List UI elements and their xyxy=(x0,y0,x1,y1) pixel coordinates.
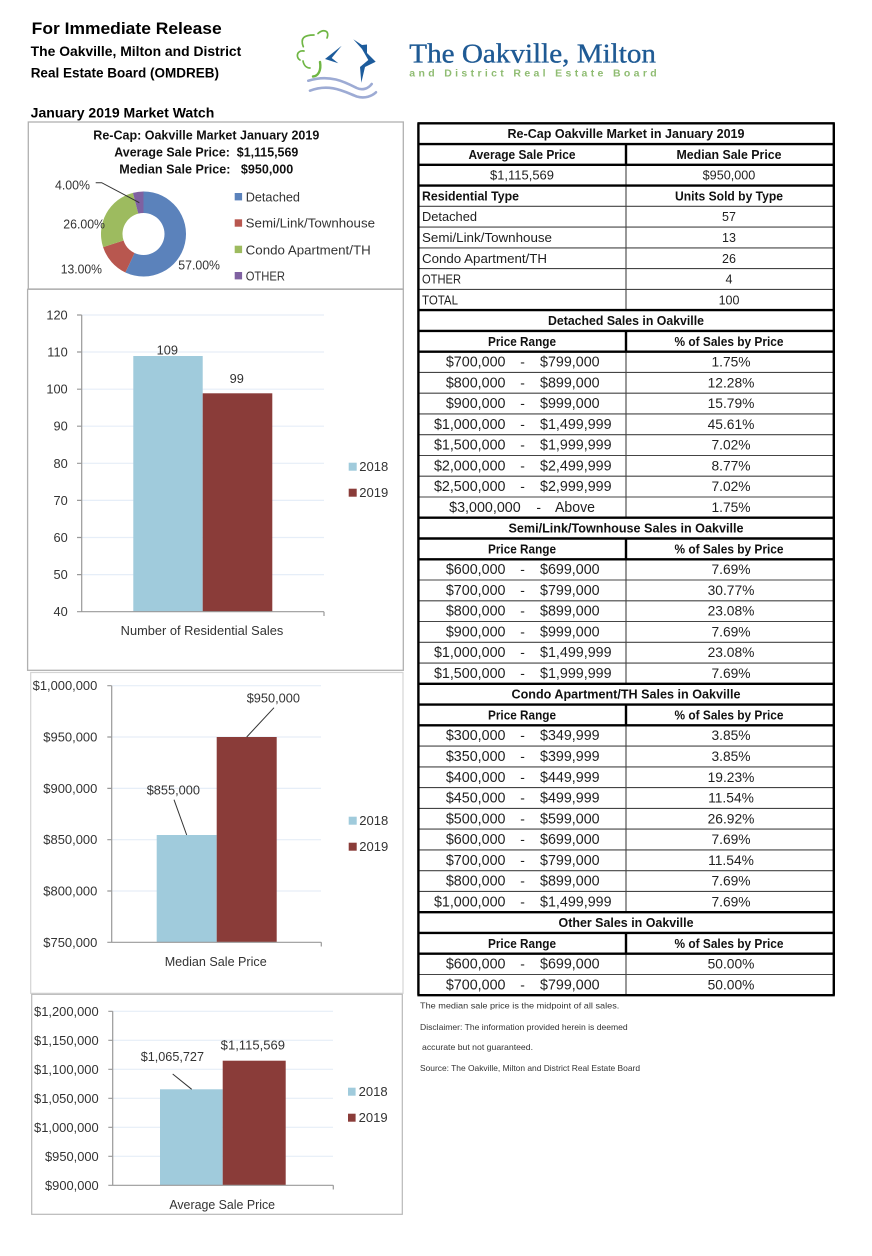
table section: condo apartment sales: $700,000 xyxy=(446,853,506,869)
donut chart xyxy=(101,192,186,276)
donut legend: Semi/Link/Townhouse xyxy=(246,216,375,231)
y axis labels: 90 xyxy=(53,419,68,434)
table section: recap: Average Sale Price xyxy=(468,148,576,162)
y axis labels: $1,000,000 xyxy=(33,678,97,693)
logo subtitle: and District Real Estate Board xyxy=(409,68,657,80)
table section: semi/link/townhouse sales: - xyxy=(520,604,525,619)
table section: semi/link/townhouse sales: - xyxy=(520,583,525,598)
legend: 2018 xyxy=(359,1084,388,1099)
table section: recap xyxy=(422,127,783,307)
chart title: Median Sale Price: $950,000 xyxy=(119,162,293,176)
table section: detached sales: % of Sales by Price xyxy=(674,335,784,349)
data labels with leader xyxy=(141,1037,285,1089)
table section: semi/link/townhouse sales: - xyxy=(520,645,525,660)
table section: condo apartment sales: $399,999 xyxy=(540,749,600,765)
table section: condo apartment sales: $800,000 xyxy=(446,874,506,890)
icon: water waves xyxy=(308,78,376,97)
table section: condo apartment sales: $1,000,000 xyxy=(434,894,506,910)
table section: recap: OTHER xyxy=(422,272,461,286)
table section: detached sales: $1,999,999 xyxy=(540,438,612,454)
y axis labels: 70 xyxy=(53,493,68,508)
y axis labels: $950,000 xyxy=(43,730,97,744)
table section: semi/link/townhouse sales: $899,000 xyxy=(540,604,600,620)
table section: detached sales: $3,000,000 xyxy=(449,500,521,516)
y axis labels: $800,000 xyxy=(43,884,97,898)
table section: other sales: $700,000 xyxy=(446,977,506,993)
table section: detached sales: - xyxy=(520,375,525,390)
legend xyxy=(349,459,388,500)
legend: 2018 xyxy=(359,813,388,828)
table section: condo apartment sales: $499,999 xyxy=(540,790,600,806)
table section: semi/link/townhouse sales: % of Sales by Price xyxy=(674,542,784,556)
chart title: Average Sale Price: $1,115,569 xyxy=(114,145,298,159)
table section: semi/link/townhouse sales: Semi/Link/Townhouse Sales in Oakville xyxy=(508,522,744,536)
table section: condo apartment sales: - xyxy=(520,853,525,868)
donut labels: 13.00% xyxy=(61,262,102,277)
y axis labels xyxy=(33,678,97,950)
table section: detached sales: $700,000 xyxy=(446,355,506,371)
chart title: Re-Cap: Oakville Market January 2019 xyxy=(93,128,319,142)
table section: detached sales: $2,999,999 xyxy=(540,479,612,495)
logo name: The Oakville, Milton xyxy=(409,38,657,68)
table section: condo apartment sales: 11.54% xyxy=(708,853,754,868)
panel: sales data table xyxy=(417,123,835,995)
y axis labels: 110 xyxy=(47,344,68,360)
donut labels: 57.00% xyxy=(178,257,220,272)
table section: condo apartment sales: $349,999 xyxy=(540,728,600,744)
legend xyxy=(348,1084,388,1125)
y axis labels xyxy=(34,1004,99,1193)
table section: semi/link/townhouse sales: - xyxy=(520,624,525,639)
table section: recap: Re-Cap Oakville Market in January 2019 xyxy=(508,127,745,141)
panel: average sale price chart xyxy=(32,994,402,1214)
title: For Immediate Release: For Immediate Release xyxy=(32,19,222,38)
panel: donut chart recap xyxy=(28,122,403,289)
table section: condo apartment sales: 7.69% xyxy=(711,894,751,909)
y axis labels: 60 xyxy=(53,530,68,545)
table section: condo apartment sales: $899,000 xyxy=(540,874,600,890)
data labels with leader: $1,065,727 xyxy=(141,1049,204,1064)
table section: detached sales: $2,000,000 xyxy=(434,458,506,474)
legend: 2019 xyxy=(359,485,388,500)
table section: recap: Median Sale Price xyxy=(676,148,782,162)
table section: detached sales xyxy=(434,314,784,516)
table section: detached sales: Price Range xyxy=(488,335,556,349)
table section: condo apartment sales: $350,000 xyxy=(446,749,506,765)
table section: condo apartment sales: 19.23% xyxy=(708,770,754,785)
table section: detached sales: $1,000,000 xyxy=(434,417,506,433)
donut legend: OTHER xyxy=(246,268,285,283)
data labels with leaders: $855,000 xyxy=(147,782,200,797)
table section: semi/link/townhouse sales: $1,000,000 xyxy=(434,645,506,661)
table section: detached sales: - xyxy=(520,396,525,411)
y axis labels xyxy=(46,308,68,619)
table section: detached sales: $2,500,000 xyxy=(434,479,506,495)
data labels: 109 xyxy=(157,342,178,357)
table section: recap: 100 xyxy=(719,293,739,307)
y axis labels: $900,000 xyxy=(43,781,97,796)
y axis labels: $1,050,000 xyxy=(34,1091,99,1106)
table section: condo apartment sales: $400,000 xyxy=(446,770,506,786)
table section: semi/link/townhouse sales: $900,000 xyxy=(446,624,506,640)
table section: condo apartment sales: - xyxy=(520,728,525,743)
table section: detached sales: 12.28% xyxy=(708,375,754,390)
y axis labels: $1,200,000 xyxy=(34,1004,99,1019)
table section: recap: Semi/Link/Townhouse xyxy=(422,231,552,245)
table section: condo apartment sales: $600,000 xyxy=(446,832,506,848)
table section: semi/link/townhouse sales xyxy=(434,522,784,682)
table section: condo apartment sales: $599,000 xyxy=(540,811,600,827)
donut labels xyxy=(55,177,220,277)
table section: recap: 13 xyxy=(722,231,736,245)
table section: detached sales: $799,000 xyxy=(540,355,600,371)
heading: board name line 1: The Oakville, Milton and District xyxy=(31,44,242,59)
table section: other sales: 50.00% xyxy=(708,977,754,992)
y axis labels: $1,100,000 xyxy=(34,1062,99,1077)
table section: semi/link/townhouse sales: 23.08% xyxy=(708,645,754,660)
table section: condo apartment sales: $1,499,999 xyxy=(540,894,612,910)
y axis labels: $850,000 xyxy=(43,832,97,847)
legend xyxy=(349,813,388,854)
table section: condo apartment sales: 3.85% xyxy=(711,749,751,764)
legend: 2019 xyxy=(359,839,388,854)
table section: semi/link/townhouse sales: 30.77% xyxy=(708,583,754,598)
table section: condo apartment sales: - xyxy=(520,749,525,764)
table section: condo apartment sales: 11.54% xyxy=(708,790,754,806)
table section: semi/link/townhouse sales: - xyxy=(520,666,525,681)
table section: condo apartment sales: - xyxy=(520,811,525,826)
y axis labels: $950,000 xyxy=(45,1149,99,1164)
table section: condo apartment sales: Condo Apartment/TH Sales in Oakville xyxy=(512,688,741,702)
table section: condo apartment sales: 7.69% xyxy=(711,874,751,889)
table section: detached sales: 15.79% xyxy=(708,396,754,411)
table section: detached sales: $999,000 xyxy=(540,396,600,412)
footnotes and disclaimer: Source: The Oakville, Milton and District Real Estate Board xyxy=(420,1063,640,1073)
icon: blue house strokes xyxy=(325,39,376,83)
header: release title block xyxy=(31,19,242,120)
table section: condo apartment sales: $699,000 xyxy=(540,832,600,848)
table section: other sales: 50.00% xyxy=(708,957,754,972)
table section: detached sales: 7.02% xyxy=(711,479,751,494)
y axis labels: 120 xyxy=(46,308,68,322)
y axis labels: 40 xyxy=(53,604,68,619)
table section: other sales: $799,000 xyxy=(540,977,600,993)
table section: semi/link/townhouse sales: 7.69% xyxy=(711,562,751,577)
table section: semi/link/townhouse sales: $799,000 xyxy=(540,583,600,599)
table section: recap: Condo Apartment/TH xyxy=(422,252,547,266)
x axis label: Median Sale Price xyxy=(165,954,267,969)
table section: semi/link/townhouse sales: $1,999,999 xyxy=(540,666,612,682)
bars xyxy=(160,1061,286,1185)
table section: detached sales: Detached Sales in Oakville xyxy=(548,314,704,328)
data labels: 99 xyxy=(230,371,244,386)
table section: condo apartment sales: - xyxy=(520,770,525,785)
table section: detached sales: $899,000 xyxy=(540,375,600,391)
table section: semi/link/townhouse sales: $999,000 xyxy=(540,624,600,640)
table section: detached sales: 45.61% xyxy=(708,417,754,432)
table section: recap: 4 xyxy=(726,272,733,286)
table section: recap: TOTAL xyxy=(422,293,458,307)
table section: recap: $1,115,569 xyxy=(490,169,554,183)
y axis labels: $900,000 xyxy=(45,1178,99,1193)
y axis labels: 80 xyxy=(53,456,68,471)
table section: condo apartment sales: % of Sales by Price xyxy=(674,708,784,722)
data labels with leaders: $950,000 xyxy=(247,690,300,705)
table section: other sales: - xyxy=(520,977,525,992)
table section: recap: Residential Type xyxy=(422,190,519,204)
table section: detached sales: - xyxy=(520,479,525,494)
legend: 2019 xyxy=(359,1110,388,1125)
table section: semi/link/townhouse sales: - xyxy=(520,562,525,577)
table section: recap: Detached xyxy=(422,210,477,224)
table section: condo apartment sales: - xyxy=(520,832,525,847)
table section: semi/link/townhouse sales: $1,499,999 xyxy=(540,645,612,661)
table section: condo apartment sales: - xyxy=(520,790,525,806)
table section: condo apartment sales: $799,000 xyxy=(540,853,600,869)
table section: semi/link/townhouse sales: $600,000 xyxy=(446,562,506,578)
table section: detached sales: $800,000 xyxy=(446,375,506,391)
table section: recap: 57 xyxy=(722,210,736,224)
table section: condo apartment sales: Price Range xyxy=(488,708,556,722)
table section: detached sales: - xyxy=(520,355,525,370)
table section: other sales: $600,000 xyxy=(446,957,506,973)
donut legend: Condo Apartment/TH xyxy=(246,242,371,257)
table section: recap: 26 xyxy=(722,252,736,266)
table section: other sales: % of Sales by Price xyxy=(674,937,784,951)
table section: condo apartment sales: $300,000 xyxy=(446,728,506,744)
heading: board name line 2: Real Estate Board (OMDREB) xyxy=(31,66,219,81)
table section: condo apartment sales: 3.85% xyxy=(711,728,751,743)
donut labels: 26.00% xyxy=(63,217,105,232)
table section: detached sales: Above xyxy=(555,500,595,516)
table section: semi/link/townhouse sales: 7.69% xyxy=(711,666,751,681)
table section: condo apartment sales: $500,000 xyxy=(446,811,506,827)
table section: semi/link/townhouse sales: $700,000 xyxy=(446,583,506,599)
table section: semi/link/townhouse sales: $800,000 xyxy=(446,604,506,620)
panel: number of residential sales chart xyxy=(28,289,403,670)
y axis labels: $1,000,000 xyxy=(34,1120,99,1135)
table section: detached sales: 8.77% xyxy=(711,458,751,473)
table section: semi/link/townhouse sales: 7.69% xyxy=(711,624,751,639)
table section: detached sales: $900,000 xyxy=(446,396,506,412)
footnotes and disclaimer: Disclaimer: The information provided herein is deemed xyxy=(420,1022,628,1032)
table section: detached sales: - xyxy=(520,417,525,432)
y axis labels: $1,150,000 xyxy=(34,1033,99,1048)
footnotes and disclaimer xyxy=(420,1001,640,1073)
donut legend xyxy=(235,189,375,283)
table section: recap: Units Sold by Type xyxy=(675,190,783,204)
table section: condo apartment sales: $449,999 xyxy=(540,770,600,786)
bars xyxy=(157,737,277,942)
y axis labels: $750,000 xyxy=(43,935,97,950)
table section: condo apartment sales: $450,000 xyxy=(446,790,506,806)
table section: semi/link/townhouse sales: $699,000 xyxy=(540,562,600,578)
x axis label: Average Sale Price xyxy=(169,1197,275,1212)
table section: detached sales: - xyxy=(536,500,541,515)
table section: condo apartment sales xyxy=(434,688,784,910)
x axis label: Number of Residential Sales xyxy=(121,623,283,638)
data labels with leaders xyxy=(147,690,300,835)
y axis labels: 100 xyxy=(46,382,68,397)
table section: condo apartment sales: 7.69% xyxy=(711,832,751,847)
table section: other sales: $699,000 xyxy=(540,957,600,973)
footnotes and disclaimer: The median sale price is the midpoint of all sales. xyxy=(420,1001,619,1011)
table section: condo apartment sales: 26.92% xyxy=(708,811,754,826)
panel: median sale price chart xyxy=(31,672,403,993)
donut legend: Detached xyxy=(246,189,300,204)
table section: detached sales: 1.75% xyxy=(711,355,751,370)
table section: other sales: - xyxy=(520,957,525,972)
table section: detached sales: $2,499,999 xyxy=(540,458,612,474)
bars xyxy=(133,356,272,612)
table section: detached sales: - xyxy=(520,438,525,453)
table section: detached sales: 7.02% xyxy=(711,438,751,453)
table section: condo apartment sales: - xyxy=(520,894,525,909)
donut labels: 4.00% xyxy=(55,177,90,192)
table section: other sales: Other Sales in Oakville xyxy=(558,916,694,930)
table section: detached sales: $1,499,999 xyxy=(540,417,612,433)
data labels with leader: $1,115,569 xyxy=(221,1037,285,1052)
legend: 2018 xyxy=(359,459,388,474)
table section: recap: $950,000 xyxy=(703,169,755,183)
heading: market watch: January 2019 Market Watch xyxy=(31,105,214,120)
table section: condo apartment sales: - xyxy=(520,874,525,889)
table section: semi/link/townhouse sales: $1,500,000 xyxy=(434,666,506,682)
table section: semi/link/townhouse sales: 23.08% xyxy=(708,604,754,619)
table section: other sales xyxy=(446,916,784,993)
icon: green tree outline xyxy=(297,31,328,76)
data labels xyxy=(157,342,244,386)
chart title xyxy=(93,128,319,176)
table section: detached sales: - xyxy=(520,458,525,473)
table section: detached sales: $1,500,000 xyxy=(434,438,506,454)
table section: detached sales: 1.75% xyxy=(711,500,751,515)
table section: semi/link/townhouse sales: Price Range xyxy=(488,542,556,556)
y axis labels: 50 xyxy=(53,567,68,582)
logo: The Oakville, Milton and District Real Estate Board xyxy=(297,31,657,97)
table section: other sales: Price Range xyxy=(488,937,556,951)
footnotes and disclaimer: accurate but not guaranteed. xyxy=(422,1042,533,1052)
